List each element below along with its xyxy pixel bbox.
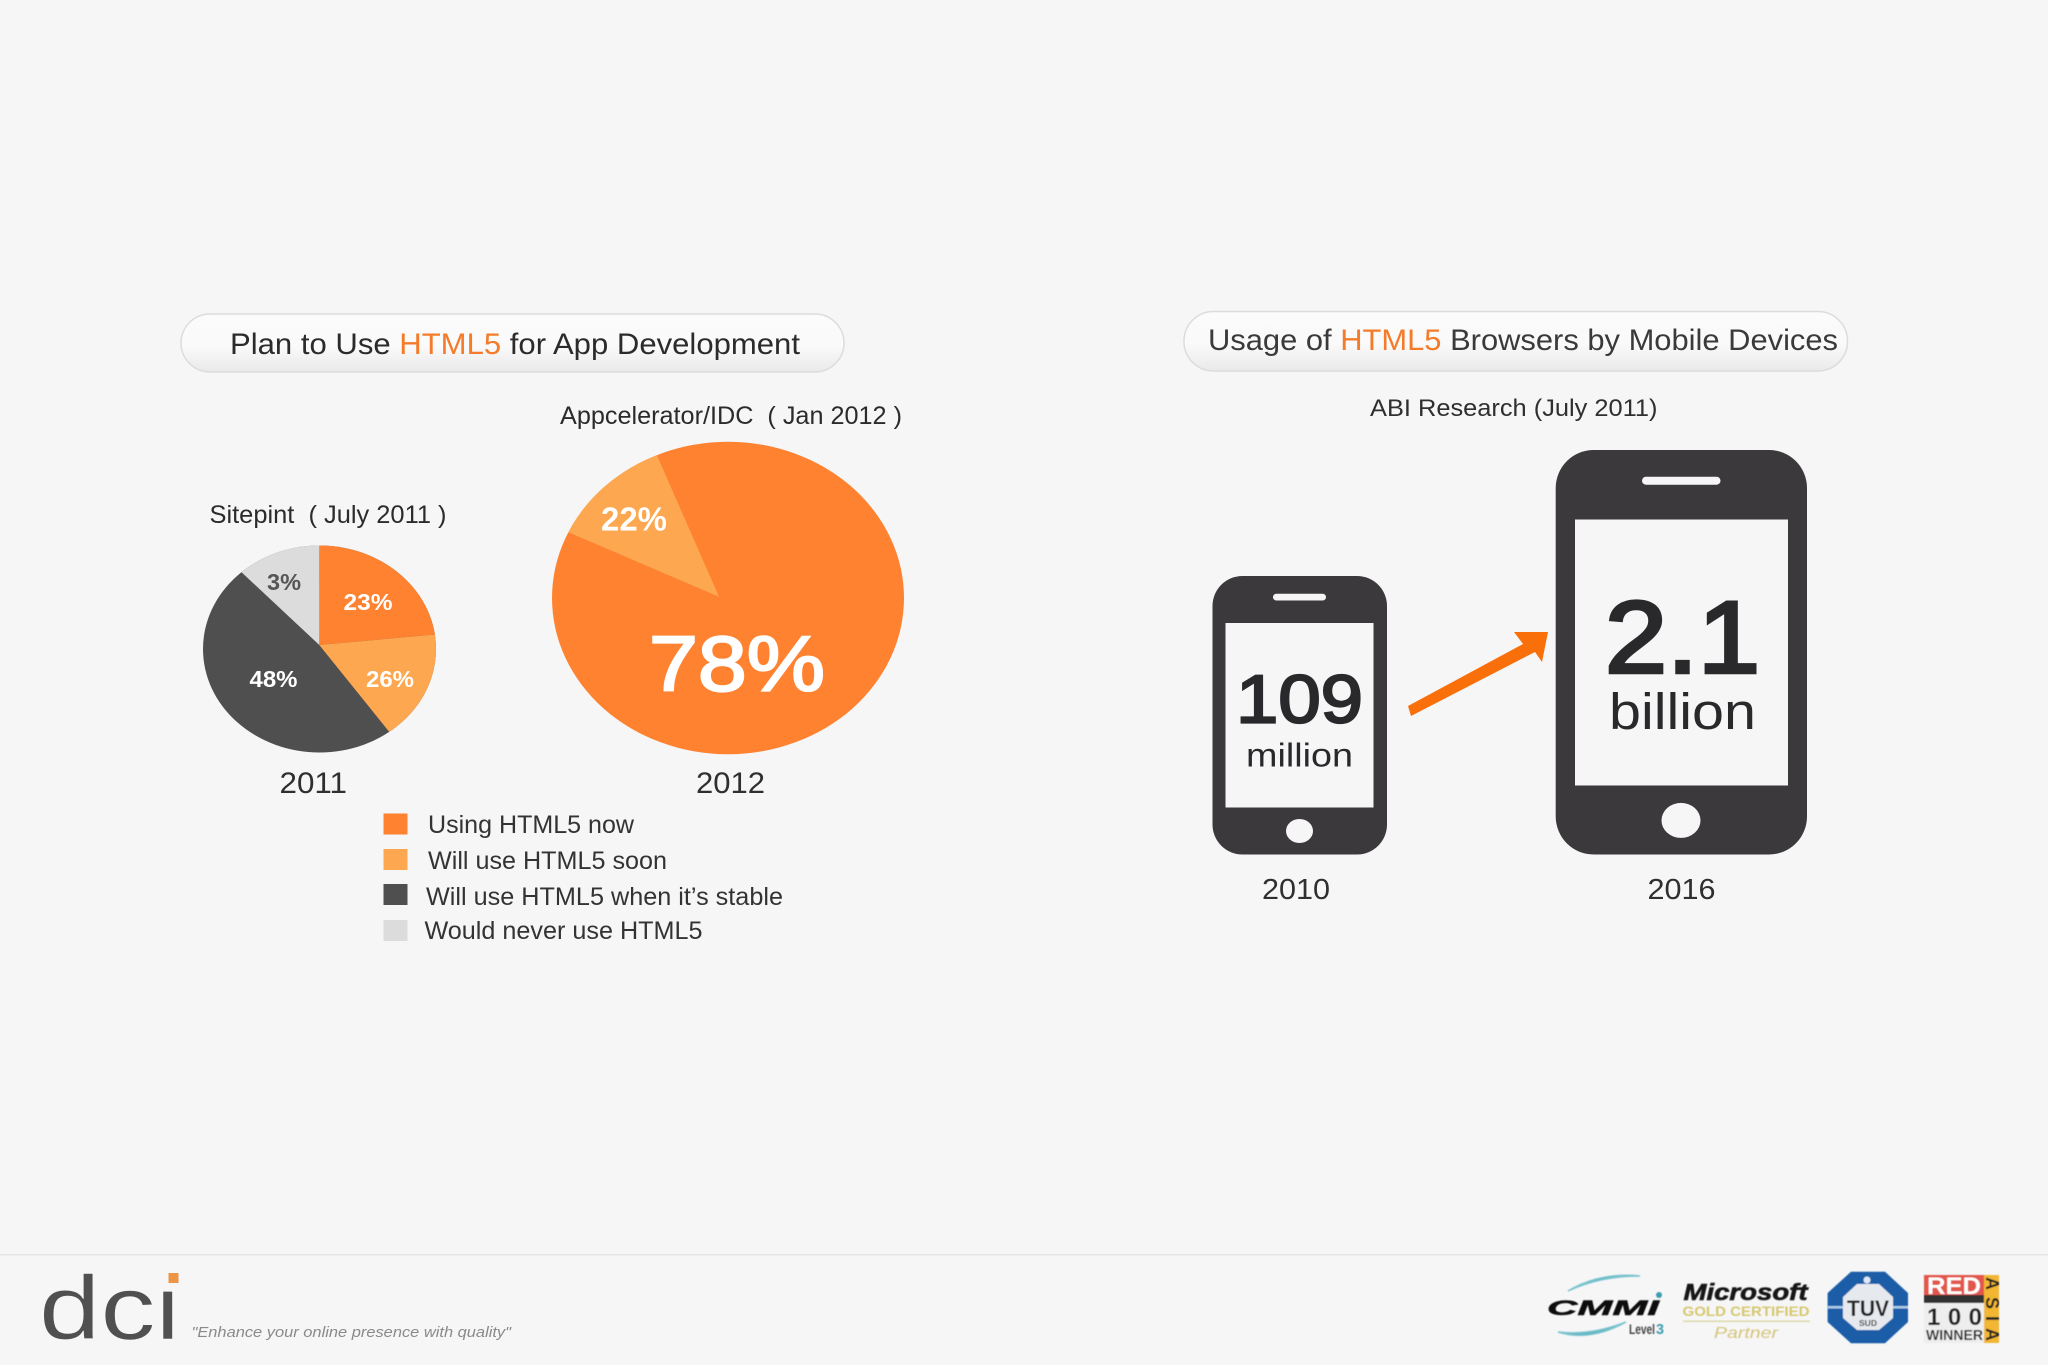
badge: TUV SUD: SUD xyxy=(1859,1319,1877,1328)
stat: 2.1 billion: 2.1 xyxy=(1605,580,1760,694)
icon: small phone 2010 xyxy=(1212,576,1387,854)
source label: ABI Research: ABI Research (July 2011) xyxy=(1370,395,1658,422)
pie chart: 2011 xyxy=(203,546,436,752)
heading pill: plan to use HTML5 xyxy=(181,314,844,372)
source label: Appcelerator 2012: Appcelerator/IDC ( Jan 2012 ) xyxy=(560,402,902,430)
year label: 2010: 2010 xyxy=(1262,874,1330,906)
badge: Red Herring Asia 100 winner: 100 xyxy=(1927,1304,1982,1331)
stat: 109 million: 109 xyxy=(1236,662,1363,738)
heading pill: usage of HTML5 browsers: Usage of HTML5 Browsers by Mobile Devices xyxy=(1208,324,1838,357)
panel: usage of HTML5 browsers by mobile devices xyxy=(1184,312,1848,906)
stat: 2.1 billion: billion xyxy=(1609,683,1756,740)
icon: large phone 2016 xyxy=(1556,450,1807,854)
badge: Microsoft gold certified partner: GOLD CERTIFIED xyxy=(1682,1303,1810,1319)
badge: TUV SUD: TUV xyxy=(1847,1296,1889,1321)
badge: CMMI level 3 xyxy=(1547,1275,1664,1338)
heading pill: usage of HTML5 browsers xyxy=(1184,312,1848,371)
tagline: "Enhance your online presence with quality" xyxy=(192,1324,512,1341)
logo: dci: dci xyxy=(39,1259,180,1359)
legend: Using HTML5 now xyxy=(428,811,635,839)
year label: 2016: 2016 xyxy=(1648,874,1716,906)
badge: CMMI level 3: CMMI xyxy=(1547,1297,1661,1320)
year label: 2011: 2011 xyxy=(280,767,347,800)
badge: Red Herring Asia 100 winner: RED xyxy=(1927,1273,1981,1300)
pie chart: 2012: 22% xyxy=(601,500,667,538)
legend: Would never use HTML5 xyxy=(424,917,702,945)
legend: Will use HTML5 soon xyxy=(428,847,667,875)
source label: Sitepoint 2011: Sitepint ( July 2011 ) xyxy=(210,501,446,529)
arrow: growth xyxy=(1408,632,1548,716)
pie chart: 2011: 23% xyxy=(344,589,392,615)
badge: Microsoft gold certified partner: Microsoft xyxy=(1684,1279,1809,1305)
stat: 2.1 billion xyxy=(1605,580,1760,740)
pie chart: 2012 xyxy=(552,442,904,754)
badge: CMMI level 3: 3 xyxy=(1656,1321,1664,1338)
badge: CMMI level 3: Level xyxy=(1629,1321,1655,1337)
pie chart: 2011: 26% xyxy=(366,666,414,692)
badge: Red Herring Asia 100 winner: WINNER xyxy=(1926,1327,1983,1344)
legend xyxy=(384,811,783,945)
panel: plan to use HTML5 for app development xyxy=(164,314,904,945)
badge: Microsoft gold certified partner: Partner xyxy=(1714,1325,1779,1342)
badge: TUV SUD xyxy=(1828,1272,1908,1343)
stat: 109 million: million xyxy=(1246,736,1353,774)
year label: 2012: 2012 xyxy=(696,767,765,800)
badge: Microsoft gold certified partner xyxy=(1682,1279,1810,1342)
stat: 109 million xyxy=(1236,662,1363,774)
pie chart: 2012: 78% xyxy=(649,620,825,708)
pie chart: 2011: 48% xyxy=(250,666,298,692)
legend: Will use HTML5 when it’s stable xyxy=(426,883,783,911)
pie chart: 2011: 3% xyxy=(267,569,301,595)
footer divider xyxy=(0,1254,2048,1256)
badge: Red Herring Asia 100 winner xyxy=(1924,1273,2002,1344)
badge: Red Herring Asia 100 winner: ASIA xyxy=(1982,1277,2002,1341)
heading pill: plan to use HTML5: Plan to Use HTML5 for App Development xyxy=(230,328,801,361)
